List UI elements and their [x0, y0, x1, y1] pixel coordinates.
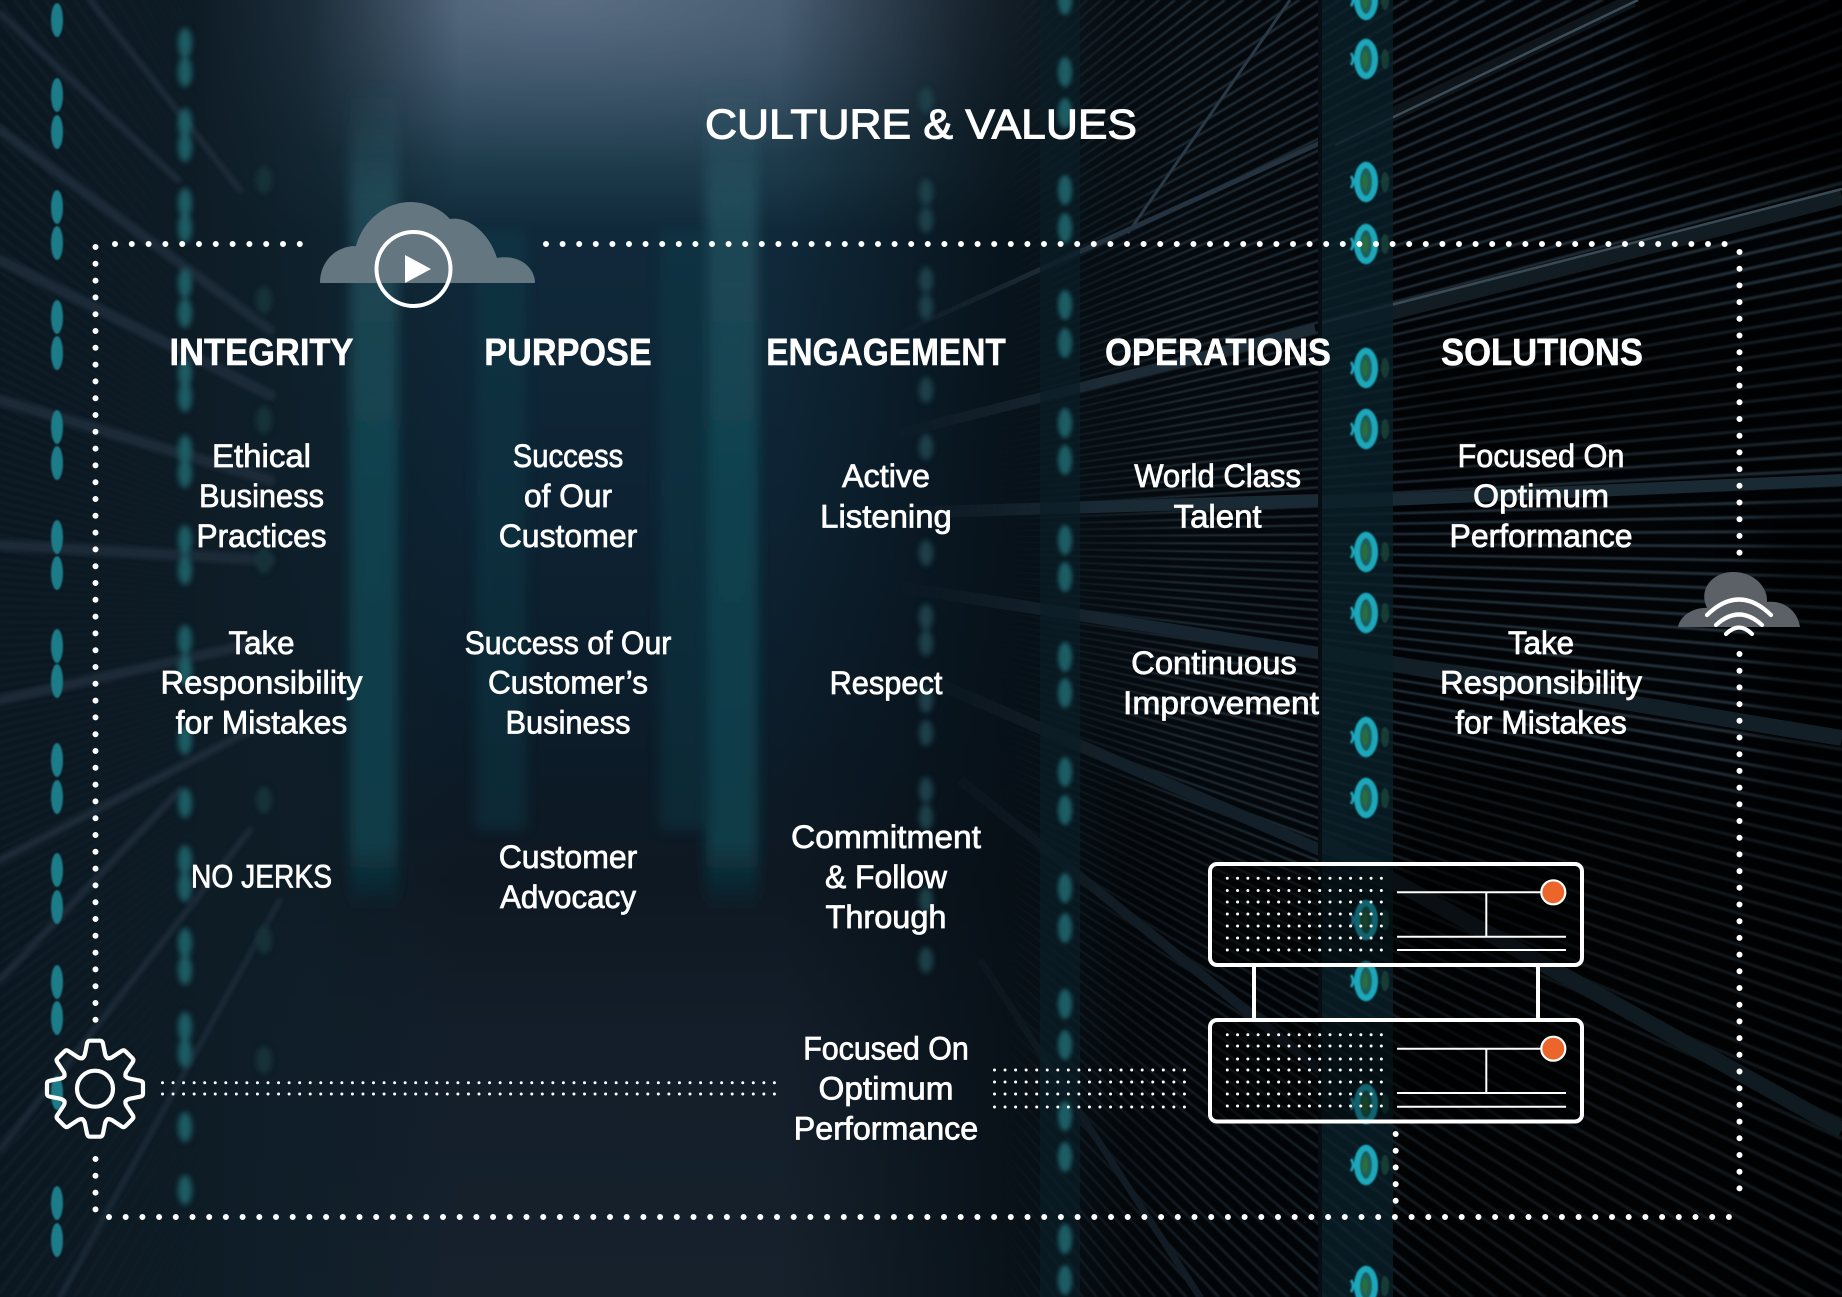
- icon: cloud with wifi signal: [1678, 572, 1800, 634]
- text: Customer Advocacy: [499, 839, 638, 915]
- server connectors: [1254, 965, 1538, 1020]
- text: Ethical Business Practices: Practices: [196, 518, 326, 554]
- text: Success of Our Customer's Business: Customer’s: [488, 664, 648, 700]
- text: World Class Talent: Talent: [1174, 498, 1262, 534]
- heading: Solutions: SOLUTIONS: [1441, 332, 1643, 374]
- text: Focused On Optimum Performance: Performance: [1450, 518, 1632, 554]
- text: Ethical Business Practices: Business: [199, 478, 324, 514]
- text: World Class Talent: [1134, 458, 1301, 534]
- heading: Engagement: ENGAGEMENT: [766, 332, 1006, 374]
- text: Commitment & Follow Through: & Follow: [825, 859, 948, 895]
- heading: Purpose: PURPOSE: [484, 332, 652, 374]
- text: Focused On Optimum Performance: [794, 1030, 978, 1146]
- text: Focused On Optimum Performance: Optimum: [818, 1070, 954, 1106]
- column: Purpose: [465, 332, 672, 915]
- text: Success of Our Customer: of Our: [524, 478, 612, 514]
- text: Success of Our Customer: Success: [513, 438, 623, 474]
- text: Commitment & Follow Through: Through: [826, 899, 946, 935]
- background: left LED strips: [51, 3, 272, 1257]
- text: Take Responsibility for Mistakes: Responsibility: [160, 664, 362, 700]
- text: Ethical Business Practices: [196, 438, 326, 554]
- text: Continuous Improvement: Improvement: [1123, 685, 1319, 721]
- background: center and right rack rails: [900, 0, 1842, 1297]
- text: Respect: Respect: [830, 665, 943, 701]
- text: Customer Advocacy: Advocacy: [500, 879, 636, 915]
- text: Take Responsibility for Mistakes: for Mistakes: [1455, 704, 1627, 740]
- column: Integrity: [160, 332, 362, 894]
- background: left rack rails: [0, 0, 280, 1297]
- column: Engagement: [766, 332, 1006, 1146]
- text: No Jerks: NO JERKS: [191, 858, 332, 894]
- text: Success of Our Customer: Customer: [499, 518, 638, 554]
- text: Focused On Optimum Performance: Focused On: [1458, 438, 1624, 474]
- text: Focused On Optimum Performance: [1450, 438, 1632, 554]
- text: Success of Our Customer's Business: Business: [506, 704, 630, 740]
- text: Continuous Improvement: [1123, 645, 1319, 721]
- text: Take Responsibility for Mistakes: for Mistakes: [176, 704, 347, 740]
- heading: Operations: OPERATIONS: [1105, 332, 1331, 374]
- text: Active Listening: Listening: [820, 498, 952, 534]
- heading: Integrity: INTEGRITY: [170, 332, 354, 374]
- text: Focused On Optimum Performance: Performance: [794, 1110, 978, 1146]
- text: Success of Our Customer's Business: [465, 625, 672, 740]
- text: Focused On Optimum Performance: Focused On: [803, 1030, 969, 1066]
- text: Ethical Business Practices: Ethical: [212, 438, 311, 474]
- text: Take Responsibility for Mistakes: [1440, 625, 1642, 740]
- dotted connector from gear: [162, 1083, 776, 1094]
- text: Commitment & Follow Through: Commitment: [791, 819, 981, 855]
- text: Focused On Optimum Performance: Optimum: [1473, 478, 1609, 514]
- background: right rack slats: [1080, 0, 1842, 1297]
- text: Success of Our Customer: [499, 438, 638, 554]
- text: Active Listening: [820, 458, 952, 534]
- column: Operations: [1105, 332, 1331, 721]
- background: right rack dark zones: [1100, 0, 1842, 1297]
- background: blurred corridor columns: [350, 80, 758, 910]
- text: Success of Our Customer's Business: Success of Our: [465, 625, 672, 661]
- text: Active Listening: Active: [842, 458, 930, 494]
- text: World Class Talent: World Class: [1134, 458, 1301, 494]
- title: CULTURE & VALUES: [705, 100, 1137, 148]
- text: Commitment & Follow Through: [791, 819, 981, 935]
- text: Take Responsibility for Mistakes: Take: [1508, 625, 1574, 661]
- column: Solutions: [1440, 332, 1643, 740]
- text: Continuous Improvement: Continuous: [1131, 645, 1297, 681]
- text: Take Responsibility for Mistakes: Take: [228, 625, 294, 661]
- icon: cloud with play button: [320, 202, 535, 306]
- text: Customer Advocacy: Customer: [499, 839, 638, 875]
- server unit bottom: [1210, 1020, 1582, 1122]
- background: center-right LED strips: [919, 0, 1080, 1297]
- icon: gear: [47, 1041, 143, 1137]
- background: right rack LED strip: [1318, 0, 1393, 1297]
- icon: server stack: [1210, 864, 1582, 1122]
- text: Take Responsibility for Mistakes: Responsibility: [1440, 664, 1642, 700]
- dotted connector to servers: [994, 1070, 1186, 1107]
- dotted frame: [96, 244, 1740, 1217]
- text: Take Responsibility for Mistakes: [160, 625, 362, 740]
- server unit top: [1210, 864, 1582, 965]
